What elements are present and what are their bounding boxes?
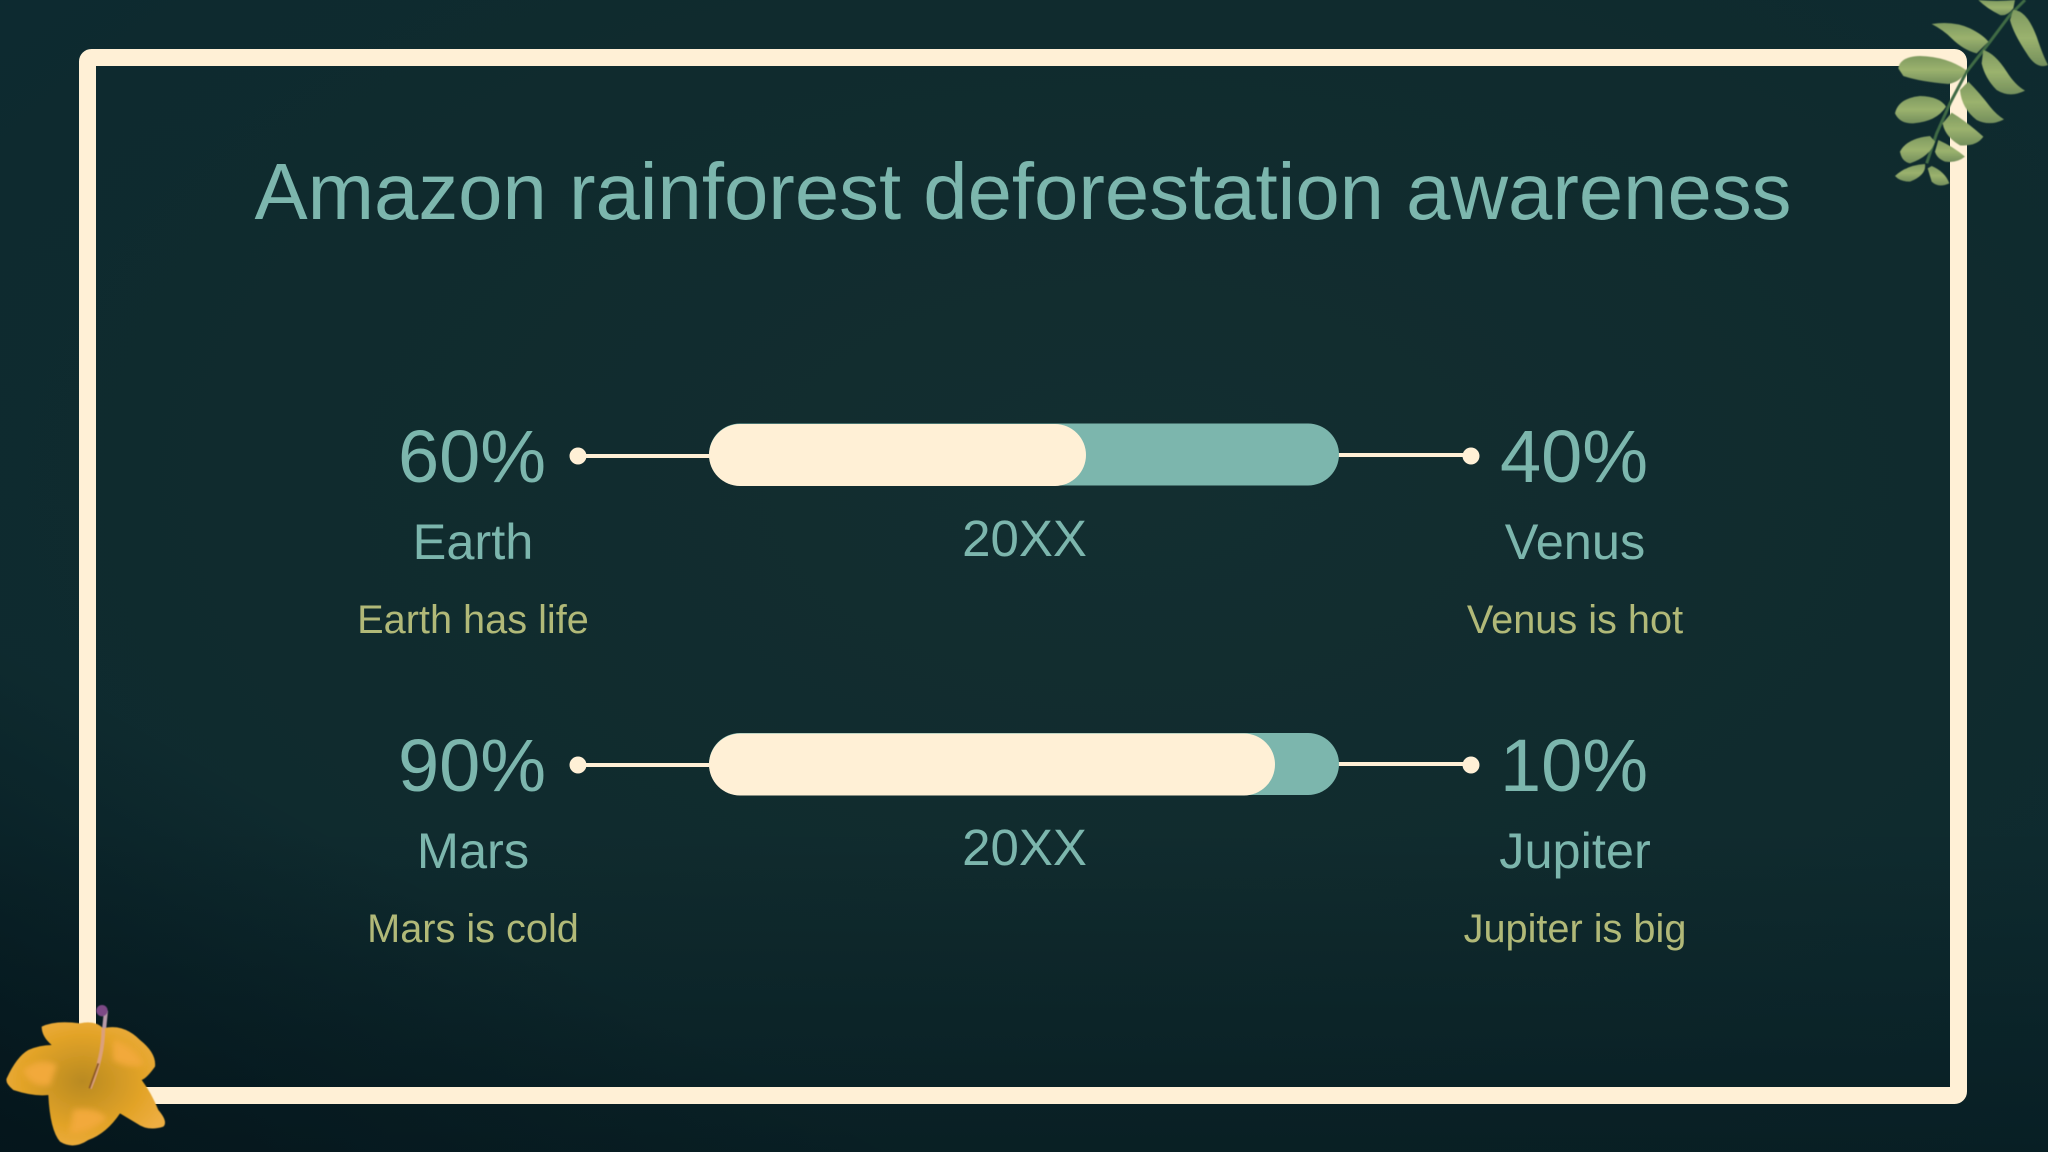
left connector: Mars <box>570 756 712 774</box>
progress bar 90/10 <box>709 733 1339 796</box>
year label: 20XX <box>962 510 1087 567</box>
icon: leafy branch <box>1895 0 2048 185</box>
stat: Venus: Venus is hot <box>1467 598 1683 642</box>
stat: Jupiter: Jupiter <box>1499 822 1651 879</box>
icon: yellow hibiscus flower <box>6 1005 165 1145</box>
stat: Earth <box>357 415 589 642</box>
left connector: Earth <box>570 448 712 464</box>
title: Amazon rainforest deforestation awareness <box>254 147 1792 236</box>
progress bar 60/40 <box>709 424 1339 486</box>
right connector: Jupiter <box>1335 756 1480 774</box>
stat: Earth: Earth <box>413 513 533 570</box>
comparison row 1 <box>357 415 1683 642</box>
stat: Venus <box>1467 415 1683 642</box>
stat: Venus: Venus <box>1505 513 1645 570</box>
stat: Earth: Earth has life <box>357 598 589 642</box>
year label: 20XX <box>962 819 1087 876</box>
stat: Mars <box>367 724 579 951</box>
right connector: Venus <box>1335 448 1480 464</box>
stat: Jupiter: Jupiter is big <box>1464 907 1686 951</box>
stat: Jupiter <box>1464 724 1686 951</box>
stat: Earth: 60% <box>398 415 546 498</box>
stat: Jupiter: 10% <box>1500 724 1648 807</box>
stat: Mars: 90% <box>398 724 546 807</box>
stat: Mars: Mars <box>417 822 529 879</box>
comparison row 2 <box>367 724 1686 951</box>
stat: Mars: Mars is cold <box>367 907 579 951</box>
stat: Venus: 40% <box>1500 415 1648 498</box>
